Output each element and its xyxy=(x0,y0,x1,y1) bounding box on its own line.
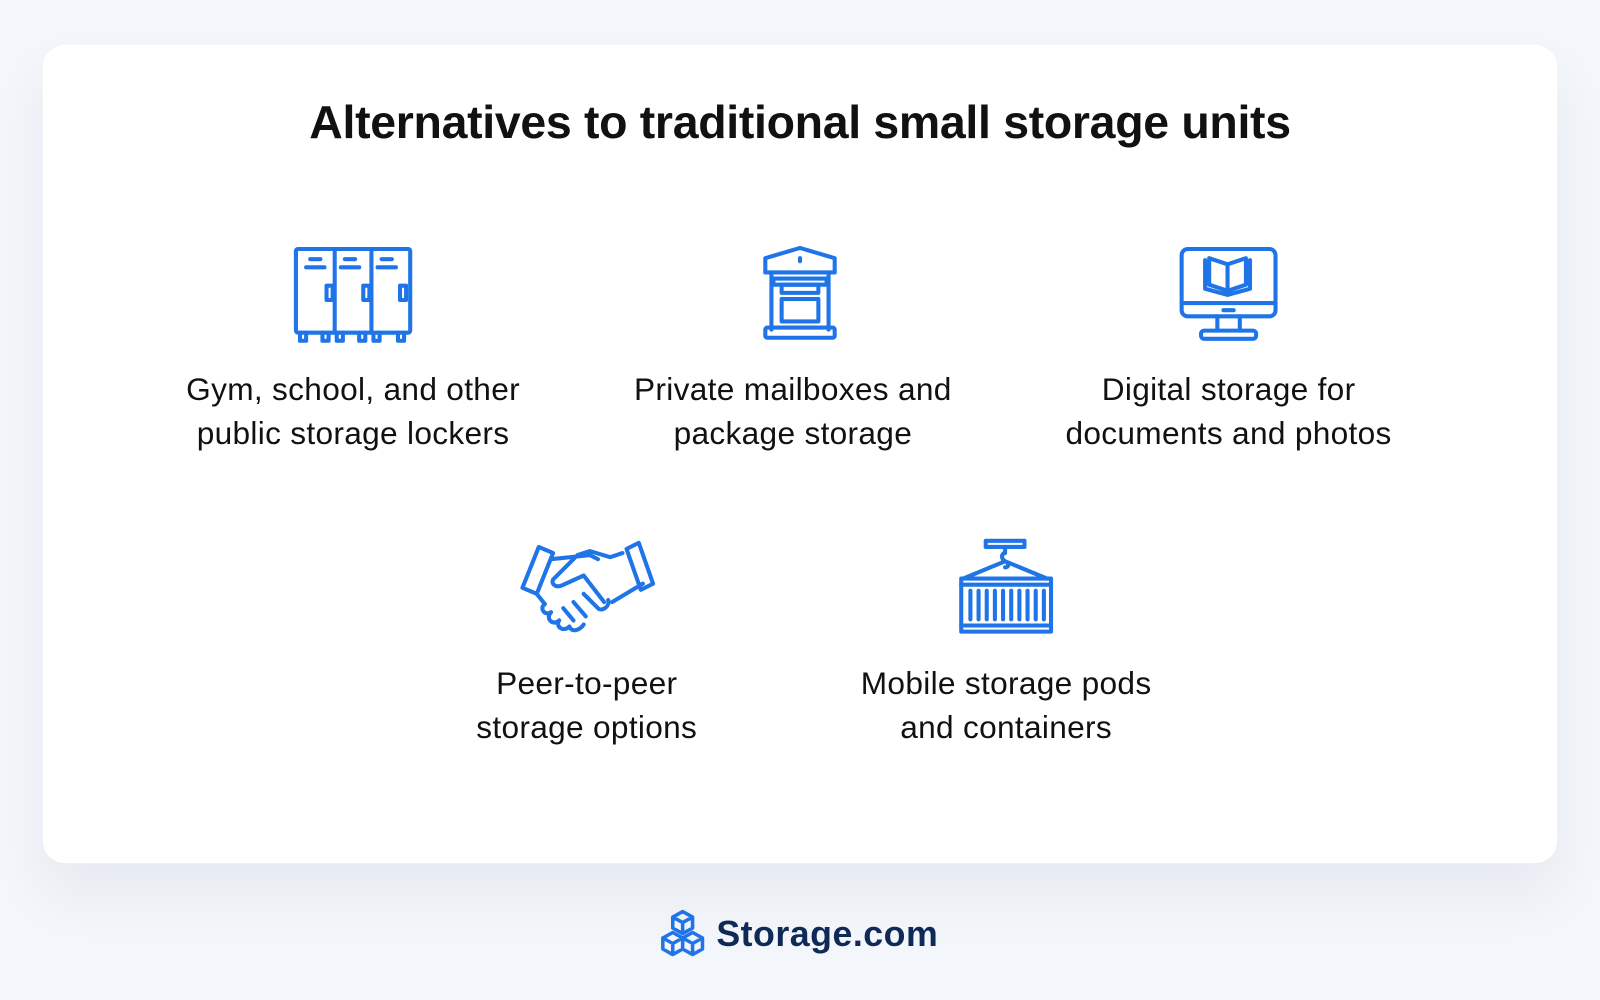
label: lockers: Gym, school, and other xyxy=(186,371,520,407)
brand name: Storage.com xyxy=(716,914,938,954)
panel: card xyxy=(43,45,1557,863)
label: mailboxes: package storage xyxy=(674,415,912,451)
icon: mailbox xyxy=(763,246,837,340)
label: digital xyxy=(1065,371,1392,451)
label: pods xyxy=(861,665,1151,745)
label: lockers xyxy=(186,371,520,451)
label: digital: Digital storage for xyxy=(1102,371,1355,407)
label: digital: documents and photos xyxy=(1065,415,1392,451)
icon: handshake xyxy=(520,540,656,632)
label: mailboxes: Private mailboxes and xyxy=(634,371,952,407)
label: peer to peer: Peer-to-peer xyxy=(496,665,677,701)
label: pods: Mobile storage pods xyxy=(861,665,1151,701)
label: lockers: public storage lockers xyxy=(197,415,509,451)
icon: cubes xyxy=(661,910,704,956)
label: mailboxes xyxy=(634,371,952,451)
label: peer to peer xyxy=(476,665,697,745)
title: Alternatives to traditional small storage units xyxy=(309,96,1291,148)
icon: container xyxy=(959,538,1054,634)
icon: digital storage xyxy=(1180,247,1278,341)
label: pods: and containers xyxy=(900,709,1112,745)
logo xyxy=(661,910,938,956)
label: peer to peer: storage options xyxy=(476,709,697,745)
icon: lockers xyxy=(294,247,412,343)
